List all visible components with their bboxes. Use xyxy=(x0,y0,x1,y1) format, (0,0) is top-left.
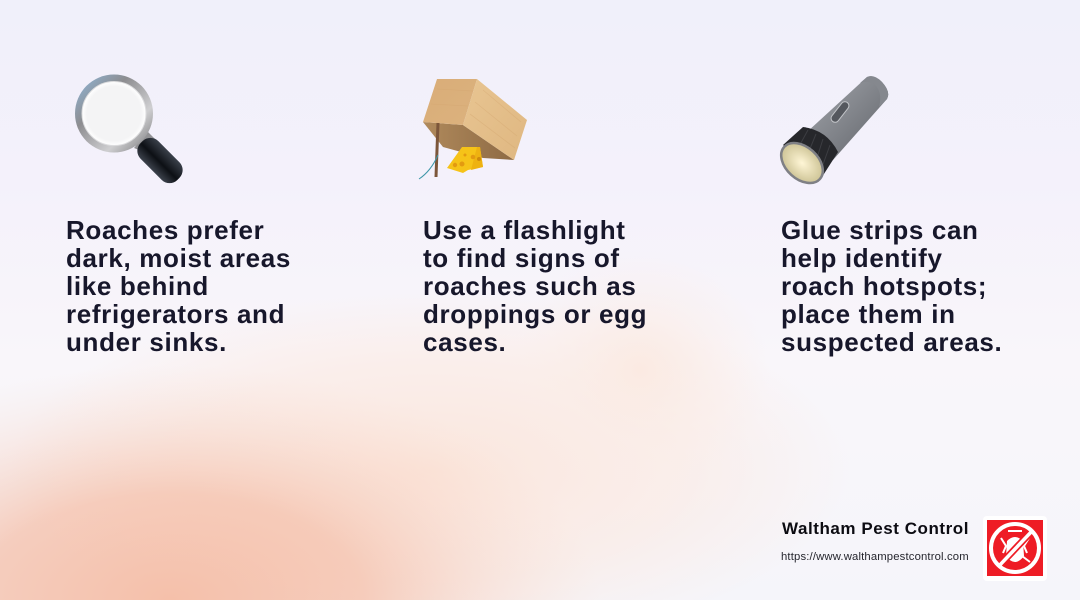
text: glue strips tip xyxy=(781,215,1002,357)
trap top face xyxy=(423,79,477,125)
text: dark moist areas: under sinks. xyxy=(66,327,227,357)
text: dark moist areas xyxy=(66,215,291,357)
icon: flashlight xyxy=(780,76,888,184)
logo: no roach badge xyxy=(983,516,1047,581)
text: flashlight tip: droppings or egg xyxy=(423,299,647,329)
text: dark moist areas: like behind xyxy=(66,271,209,301)
text: flashlight tip: cases. xyxy=(423,327,506,357)
website url: https://www.walthampestcontrol.com xyxy=(781,551,969,563)
stick and string xyxy=(436,123,438,177)
text: glue strips tip: Glue strips can xyxy=(781,215,979,245)
text: glue strips tip: place them in xyxy=(781,299,956,329)
text: flashlight tip xyxy=(423,215,647,357)
text: glue strips tip: help identify xyxy=(781,243,943,273)
trap underside xyxy=(423,122,514,160)
trap side face xyxy=(463,79,527,160)
text: flashlight tip: Use a flashlight xyxy=(423,215,626,245)
text: dark moist areas: refrigerators and xyxy=(66,299,285,329)
text: glue strips tip: roach hotspots; xyxy=(781,271,987,301)
brand name: Waltham Pest Control xyxy=(782,519,969,538)
text: flashlight tip: roaches such as xyxy=(423,271,637,301)
icon: magnifying glass xyxy=(75,74,183,184)
text: glue strips tip: suspected areas. xyxy=(781,327,1002,357)
icon: box trap with cheese xyxy=(418,79,527,180)
text: dark moist areas: dark, moist areas xyxy=(66,243,291,273)
text: dark moist areas: Roaches prefer xyxy=(66,215,264,245)
text: flashlight tip: to find signs of xyxy=(423,243,620,273)
cheese xyxy=(447,147,483,173)
